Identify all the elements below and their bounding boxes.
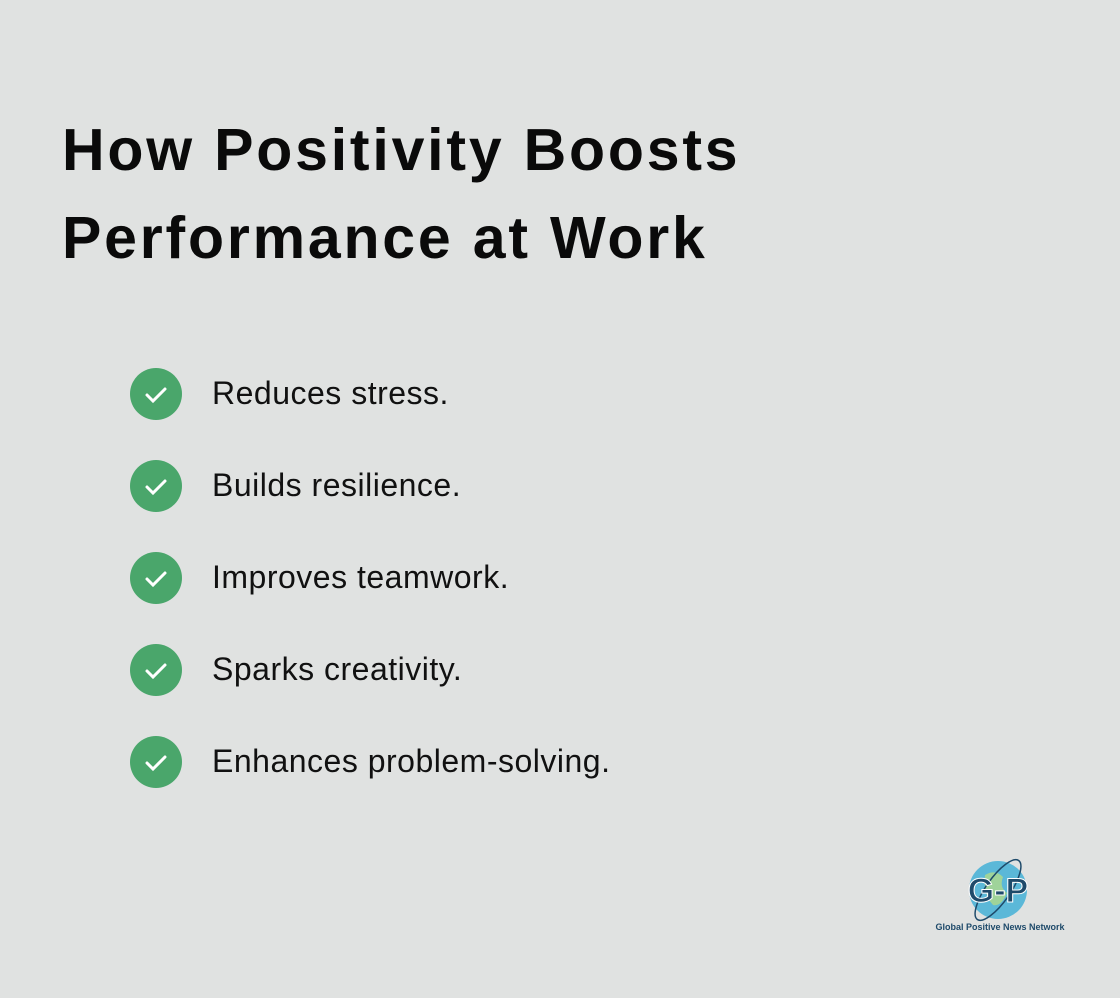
title	[62, 117, 740, 271]
title: How Positivity Boosts	[62, 117, 740, 183]
logo: G-P	[968, 872, 1028, 910]
logo: Global Positive News Network	[935, 922, 1065, 932]
item: builds resilience: Builds resilience.	[212, 467, 461, 503]
item: sparks creativity: Sparks creativity.	[212, 651, 462, 687]
logo	[935, 858, 1065, 932]
item: reduces stress	[130, 368, 449, 420]
item: improves teamwork	[130, 552, 509, 604]
title: Performance at Work	[62, 205, 708, 271]
item: improves teamwork: Improves teamwork.	[212, 559, 509, 595]
item: enhances problem-solving: Enhances problem-solving.	[212, 743, 610, 779]
item: reduces stress: Reduces stress.	[212, 375, 449, 411]
item: enhances problem-solving	[130, 736, 610, 788]
item: sparks creativity	[130, 644, 462, 696]
item: builds resilience	[130, 460, 461, 512]
